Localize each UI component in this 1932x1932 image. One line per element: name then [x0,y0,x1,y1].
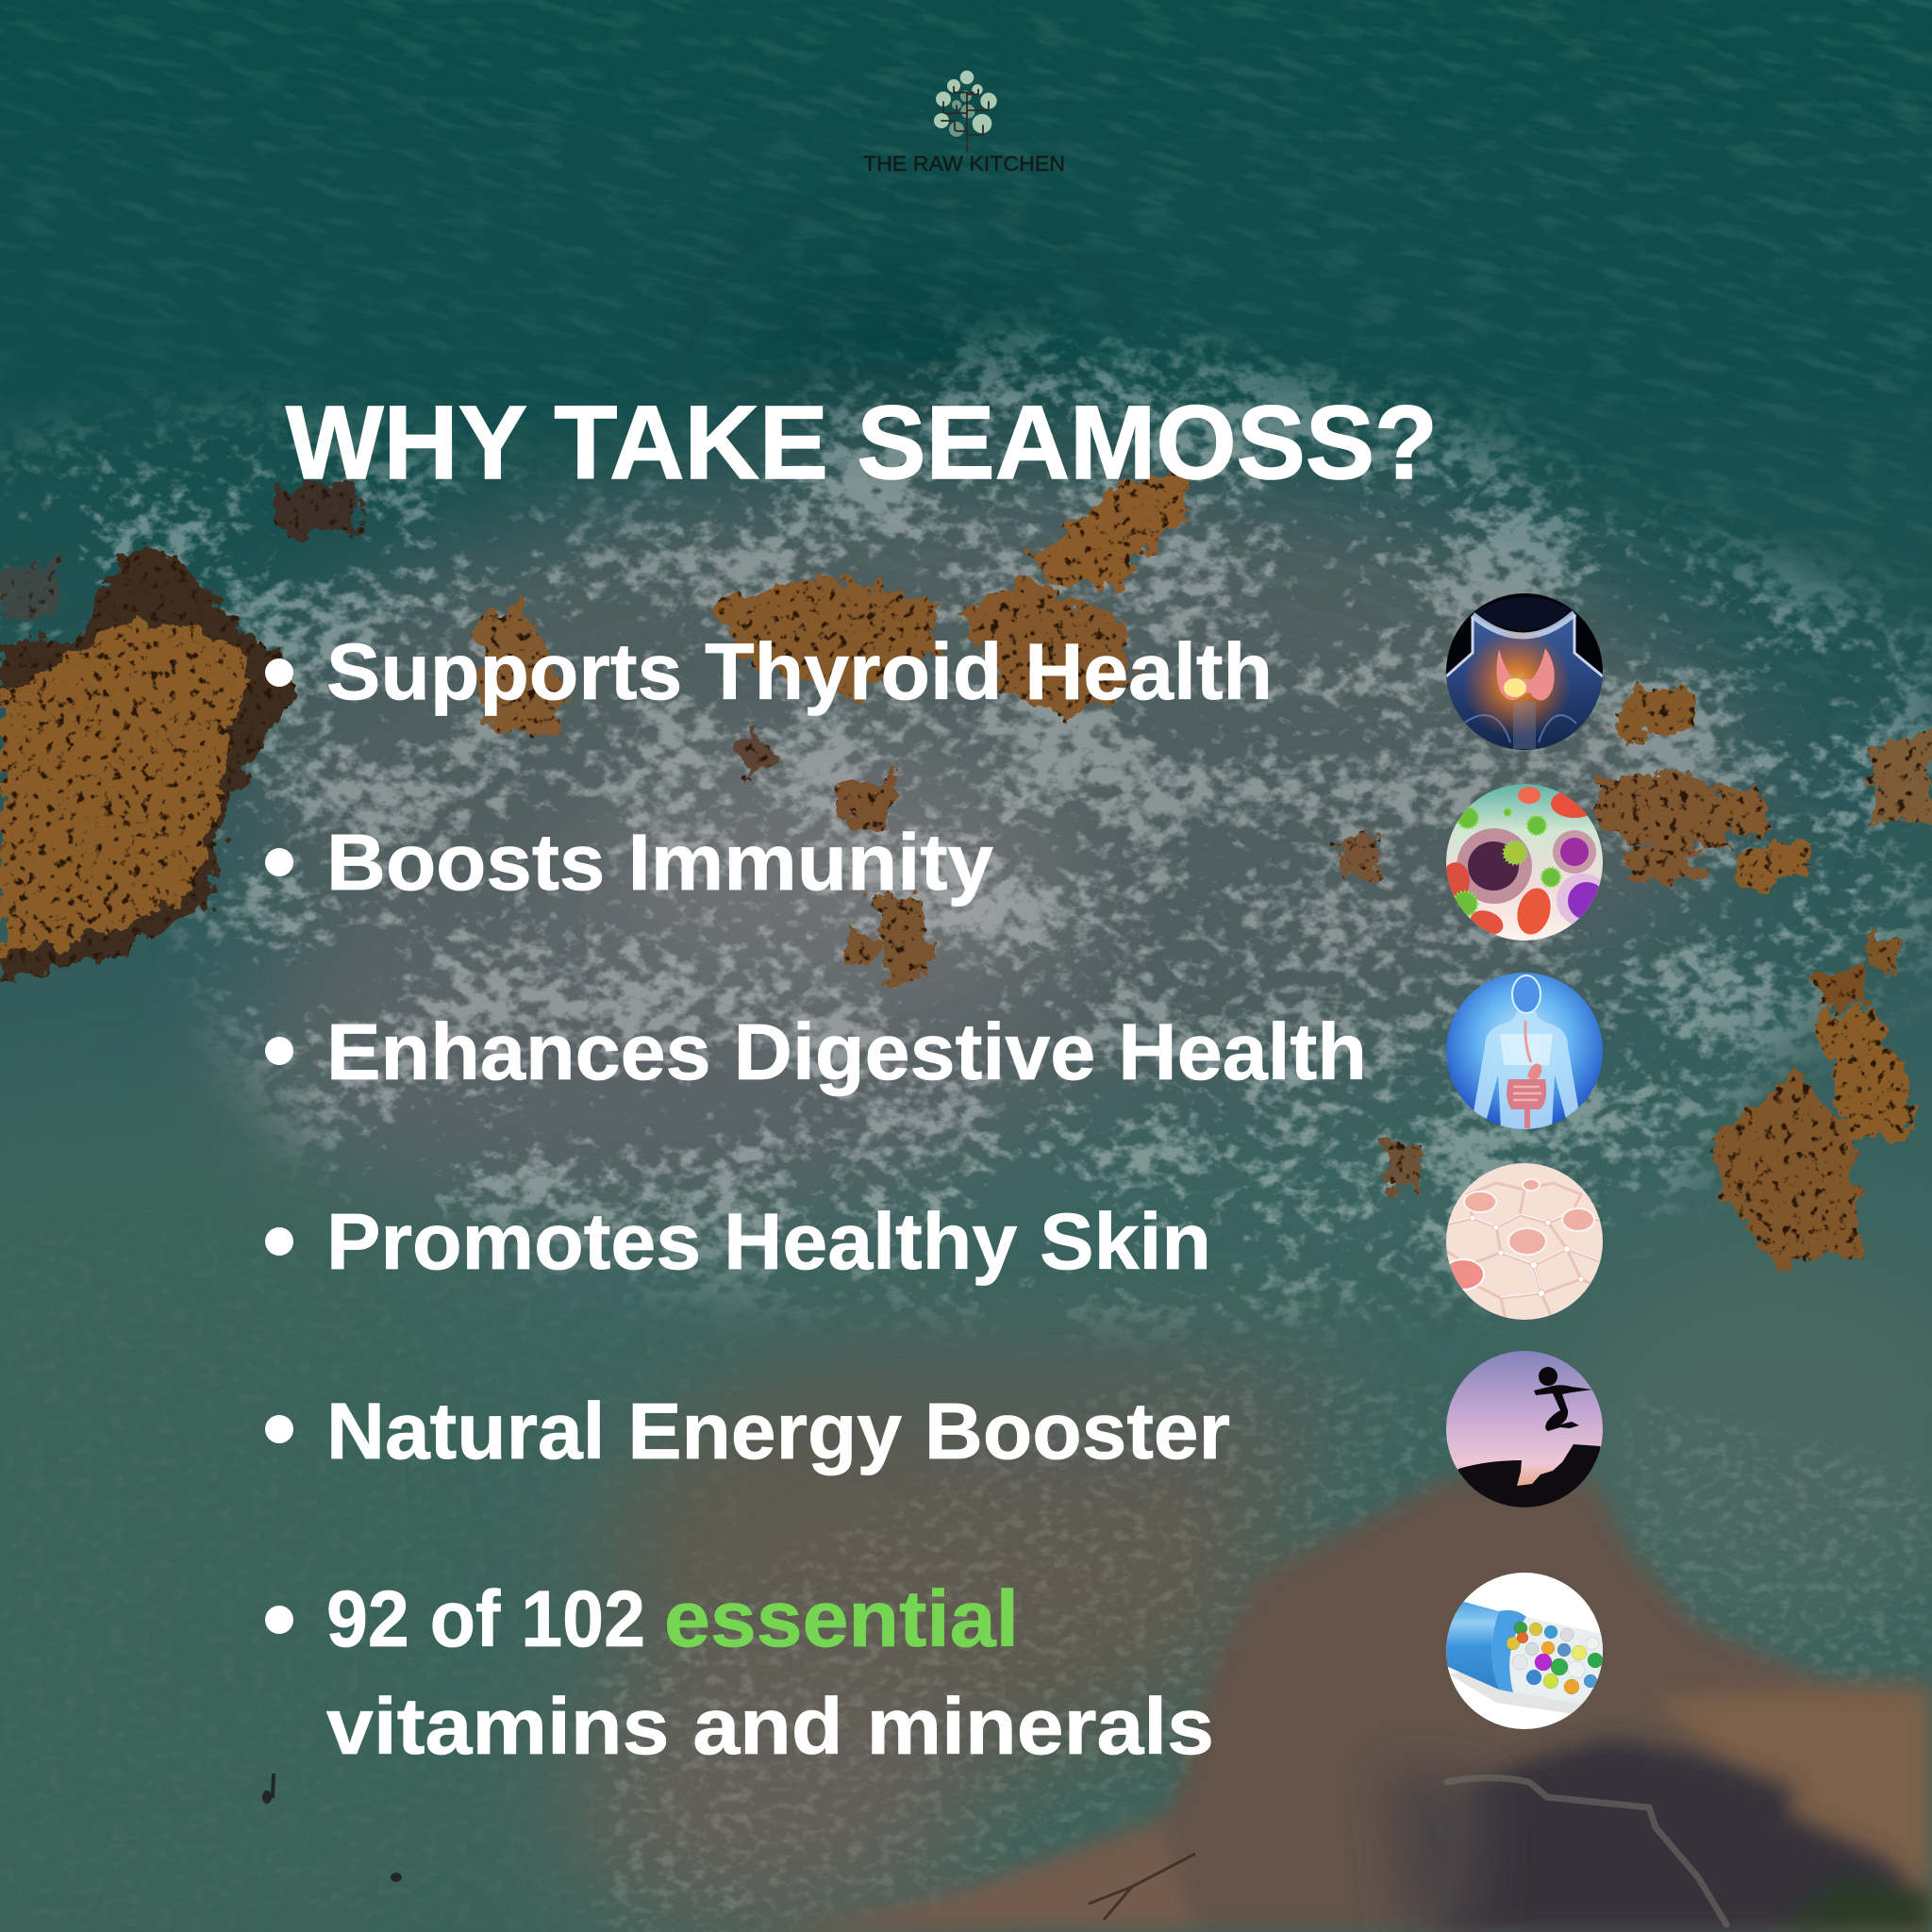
icon: immune cells [1441,784,1609,941]
logo: The Raw Kitchen: THE RAW KITCHEN [863,152,1065,175]
rocks [0,472,1932,1264]
foam [0,340,1932,1311]
icon: thyroid [1446,593,1603,750]
benefit: Boosts Immunity: Boosts Immunity [326,818,993,907]
benefit: 92 of 102 essential vitamins and minerals [265,1574,1214,1771]
benefit: 92 of 102 essential vitamins and minerals: vitamins and minerals [326,1682,1214,1771]
benefit: Natural Energy Booster: Natural Energy Booster [326,1387,1230,1475]
benefit: 92 of 102 essential vitamins and minerals: 92 of 102 [326,1574,645,1663]
benefit: Promotes Healthy Skin: Promotes Healthy Skin [326,1197,1211,1286]
icon: digestive system [1446,973,1603,1129]
icon: jumping silhouette at sunset [1446,1351,1603,1507]
logo: The Raw Kitchen [863,71,1065,175]
shore ripples [604,1340,1932,1932]
benefit: 92 of 102 essential vitamins and minerals: essential [664,1574,1019,1663]
title: WHY TAKE SEAMOSS? [286,385,1438,501]
driftwood [1447,1777,1726,1924]
icon: skin cells [1442,1163,1603,1320]
swimmers [262,1774,402,1882]
icon: vitamin capsule [1446,1573,1603,1729]
water streaks [0,0,1932,1052]
benefit: Enhances Digestive Health: Enhances Digestive Health [326,1008,1367,1096]
benefit: Supports Thyroid Health: Supports Thyroid Health [326,627,1273,716]
